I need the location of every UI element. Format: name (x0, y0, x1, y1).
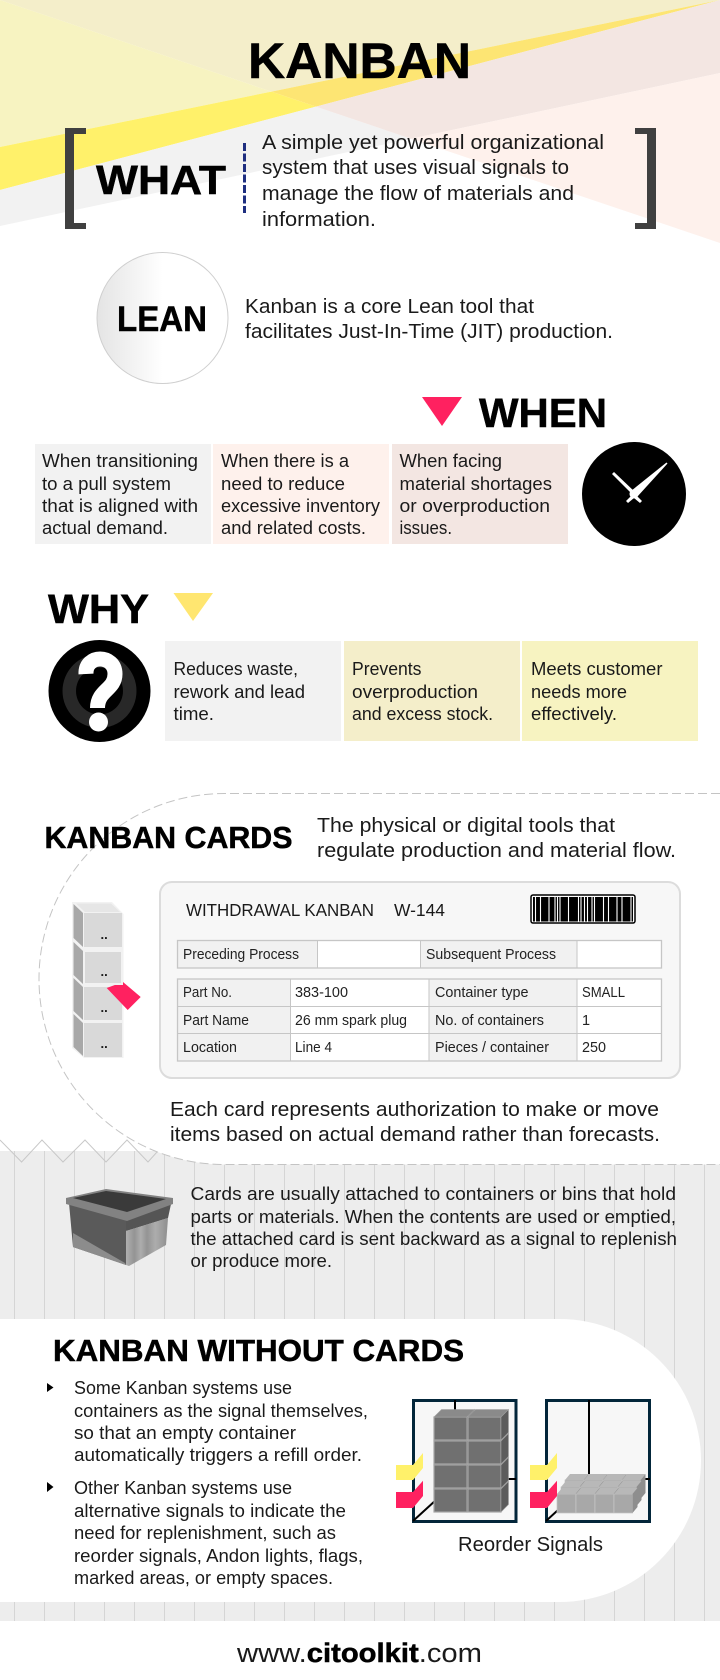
icon: low rack with reorder signals (530, 1400, 650, 1522)
bullet list item 1: Some Kanban systems use (74, 1378, 292, 1398)
table: part details: 1 (582, 1013, 590, 1029)
footer: website: www.citoolkit .com (236, 1638, 482, 1668)
bullet list item 2: marked areas, or empty spaces. (74, 1568, 333, 1588)
icon: yellow triangle (174, 593, 213, 621)
icon: stacked containers with card (72, 902, 141, 1058)
table: part details: Line 4 (295, 1040, 332, 1056)
card: when 3: issues. (400, 517, 452, 538)
text: containers description: or produce more. (190, 1250, 332, 1271)
icon: stacked containers with card: .. (100, 1000, 108, 1015)
card: when 2: excessive inventory (221, 495, 381, 516)
card: why 1: rework and lead (174, 681, 305, 702)
panel: why (48, 586, 698, 742)
bullet list item 2 (47, 1478, 363, 1588)
card: why 2 (344, 641, 520, 741)
bullet list item 1: automatically triggers a refill order. (74, 1445, 362, 1465)
table: part details: Part Name (183, 1013, 249, 1029)
heading: why: WHY (48, 586, 149, 632)
dashed divider (243, 143, 246, 213)
text: lean description: facilitates Just-In-Time (JIT) production. (245, 320, 613, 343)
caption: reorder signals: Reorder Signals (458, 1533, 603, 1556)
heading: kanban without cards: KANBAN WITHOUT CARDS (53, 1333, 464, 1368)
card: when 2: and related costs. (221, 517, 366, 538)
table: part details: SMALL (582, 985, 625, 1001)
card: when 3 (392, 444, 568, 544)
striped grey band (0, 1151, 720, 1621)
panel: lean (97, 252, 613, 384)
text: kanban cards description: regulate production and material flow. (317, 839, 676, 862)
text: containers description: Cards are usually attached to containers or bins that hold (190, 1183, 676, 1204)
card title: WITHDRAWAL KANBAN (186, 900, 374, 920)
icon: bin (66, 1189, 173, 1266)
card: when 1: to a pull system (42, 473, 171, 494)
card: when 2 (213, 444, 389, 544)
table: part details: No. of containers (435, 1013, 544, 1029)
icon: stacked containers with card: .. (100, 1036, 108, 1051)
text: containers description (190, 1183, 677, 1271)
panel: containers (66, 1183, 677, 1271)
text: what description: system that uses visual signals to (262, 156, 569, 179)
card: why 1: time. (174, 703, 214, 724)
table: part details: Container type (435, 985, 528, 1001)
icon: question mark (48, 640, 150, 742)
text: kanban cards description: The physical or digital tools that (317, 814, 615, 837)
table: processes (178, 940, 662, 968)
table: part details: Part No. (183, 985, 232, 1001)
card: why 3: needs more (531, 681, 627, 702)
icon: lean circle (97, 252, 228, 384)
panel: when (35, 390, 686, 546)
text: authorization note (170, 1098, 660, 1146)
bullet list item 1: containers as the signal themselves, (74, 1401, 368, 1421)
card: when 1: that is aligned with (42, 495, 198, 516)
icon: clock (582, 442, 686, 546)
card: why 1 (165, 641, 341, 741)
table: part details: Pieces / container (435, 1040, 549, 1056)
card: when 2: need to reduce (221, 473, 345, 494)
heading: what: WHAT (96, 157, 226, 203)
icon: left bracket (65, 128, 86, 229)
panel: withdrawal kanban card (160, 882, 680, 1078)
table: part details: 383-100 (295, 985, 348, 1001)
bullet list item 2: need for replenishment, such as (74, 1523, 336, 1543)
bullet list item 2: alternative signals to indicate the (74, 1501, 346, 1521)
panel: what (65, 128, 656, 231)
table: part details: Location (183, 1040, 237, 1056)
text: lean description (245, 295, 613, 343)
text: containers description: the attached card is sent backward as a signal to replenish (190, 1228, 677, 1249)
heading: kanban cards: KANBAN CARDS (44, 820, 292, 855)
text: what description (262, 131, 604, 231)
bullet list item 2: reorder signals, Andon lights, flags, (74, 1546, 363, 1566)
bullet list item 1 (47, 1378, 368, 1465)
card: why 1: Reduces waste, (174, 658, 298, 679)
icon: barcode (531, 895, 635, 923)
text: authorization note: items based on actual demand rather than forecasts. (170, 1123, 660, 1146)
card: when 3: When facing (400, 450, 502, 471)
table: processes: Preceding Process (183, 947, 299, 963)
table: part details: 250 (582, 1040, 606, 1056)
card: when 3: or overproduction (400, 495, 550, 516)
card: when 1: actual demand. (42, 517, 168, 538)
card: why 2: and excess stock. (352, 703, 493, 724)
card: why 2: overproduction (352, 681, 478, 702)
card: why 3: Meets customer (531, 658, 662, 679)
icon: stacked containers with card: .. (100, 964, 108, 979)
text: what description: manage the flow of materials and (262, 182, 574, 205)
card: when 3: material shortages (400, 473, 552, 494)
text: authorization note: Each card represents authorization to make or move (170, 1098, 659, 1121)
table: part details: 26 mm spark plug (295, 1013, 407, 1029)
card title: W-144 (394, 900, 445, 920)
card: when 1: When transitioning (42, 450, 198, 471)
text: what description: information. (262, 208, 376, 231)
icon: pink triangle (422, 397, 462, 426)
table: part details (177, 979, 662, 1061)
title: KANBAN (248, 33, 471, 89)
background: diagonal colour bands (0, 0, 720, 243)
text: what description: A simple yet powerful organizational (262, 131, 604, 154)
card: when 1 (35, 444, 211, 544)
table: processes: Subsequent Process (426, 947, 556, 963)
text: lean description: Kanban is a core Lean tool that (245, 295, 534, 318)
bullet list item 2: Other Kanban systems use (74, 1478, 292, 1498)
bullet list item 1: so that an empty container (74, 1423, 296, 1443)
heading: lean: LEAN (117, 300, 207, 339)
panel: kanban without cards (0, 1319, 701, 1602)
card: why 2: Prevents (352, 658, 422, 679)
card: why 3: effectively. (531, 703, 617, 724)
icon: stacked containers with card: .. (100, 927, 108, 942)
text: kanban cards description (317, 814, 676, 862)
card: when 2: When there is a (221, 450, 350, 471)
card: why 3 (522, 641, 698, 741)
panel: kanban cards (44, 814, 680, 1146)
icon: full rack with reorder signals (396, 1400, 516, 1522)
panel: dashed kanban cards shape (39, 794, 720, 1164)
text: containers description: parts or materials. When the contents are used or emptied, (190, 1206, 676, 1227)
heading: when: WHEN (479, 390, 607, 436)
icon: right bracket (635, 128, 656, 229)
